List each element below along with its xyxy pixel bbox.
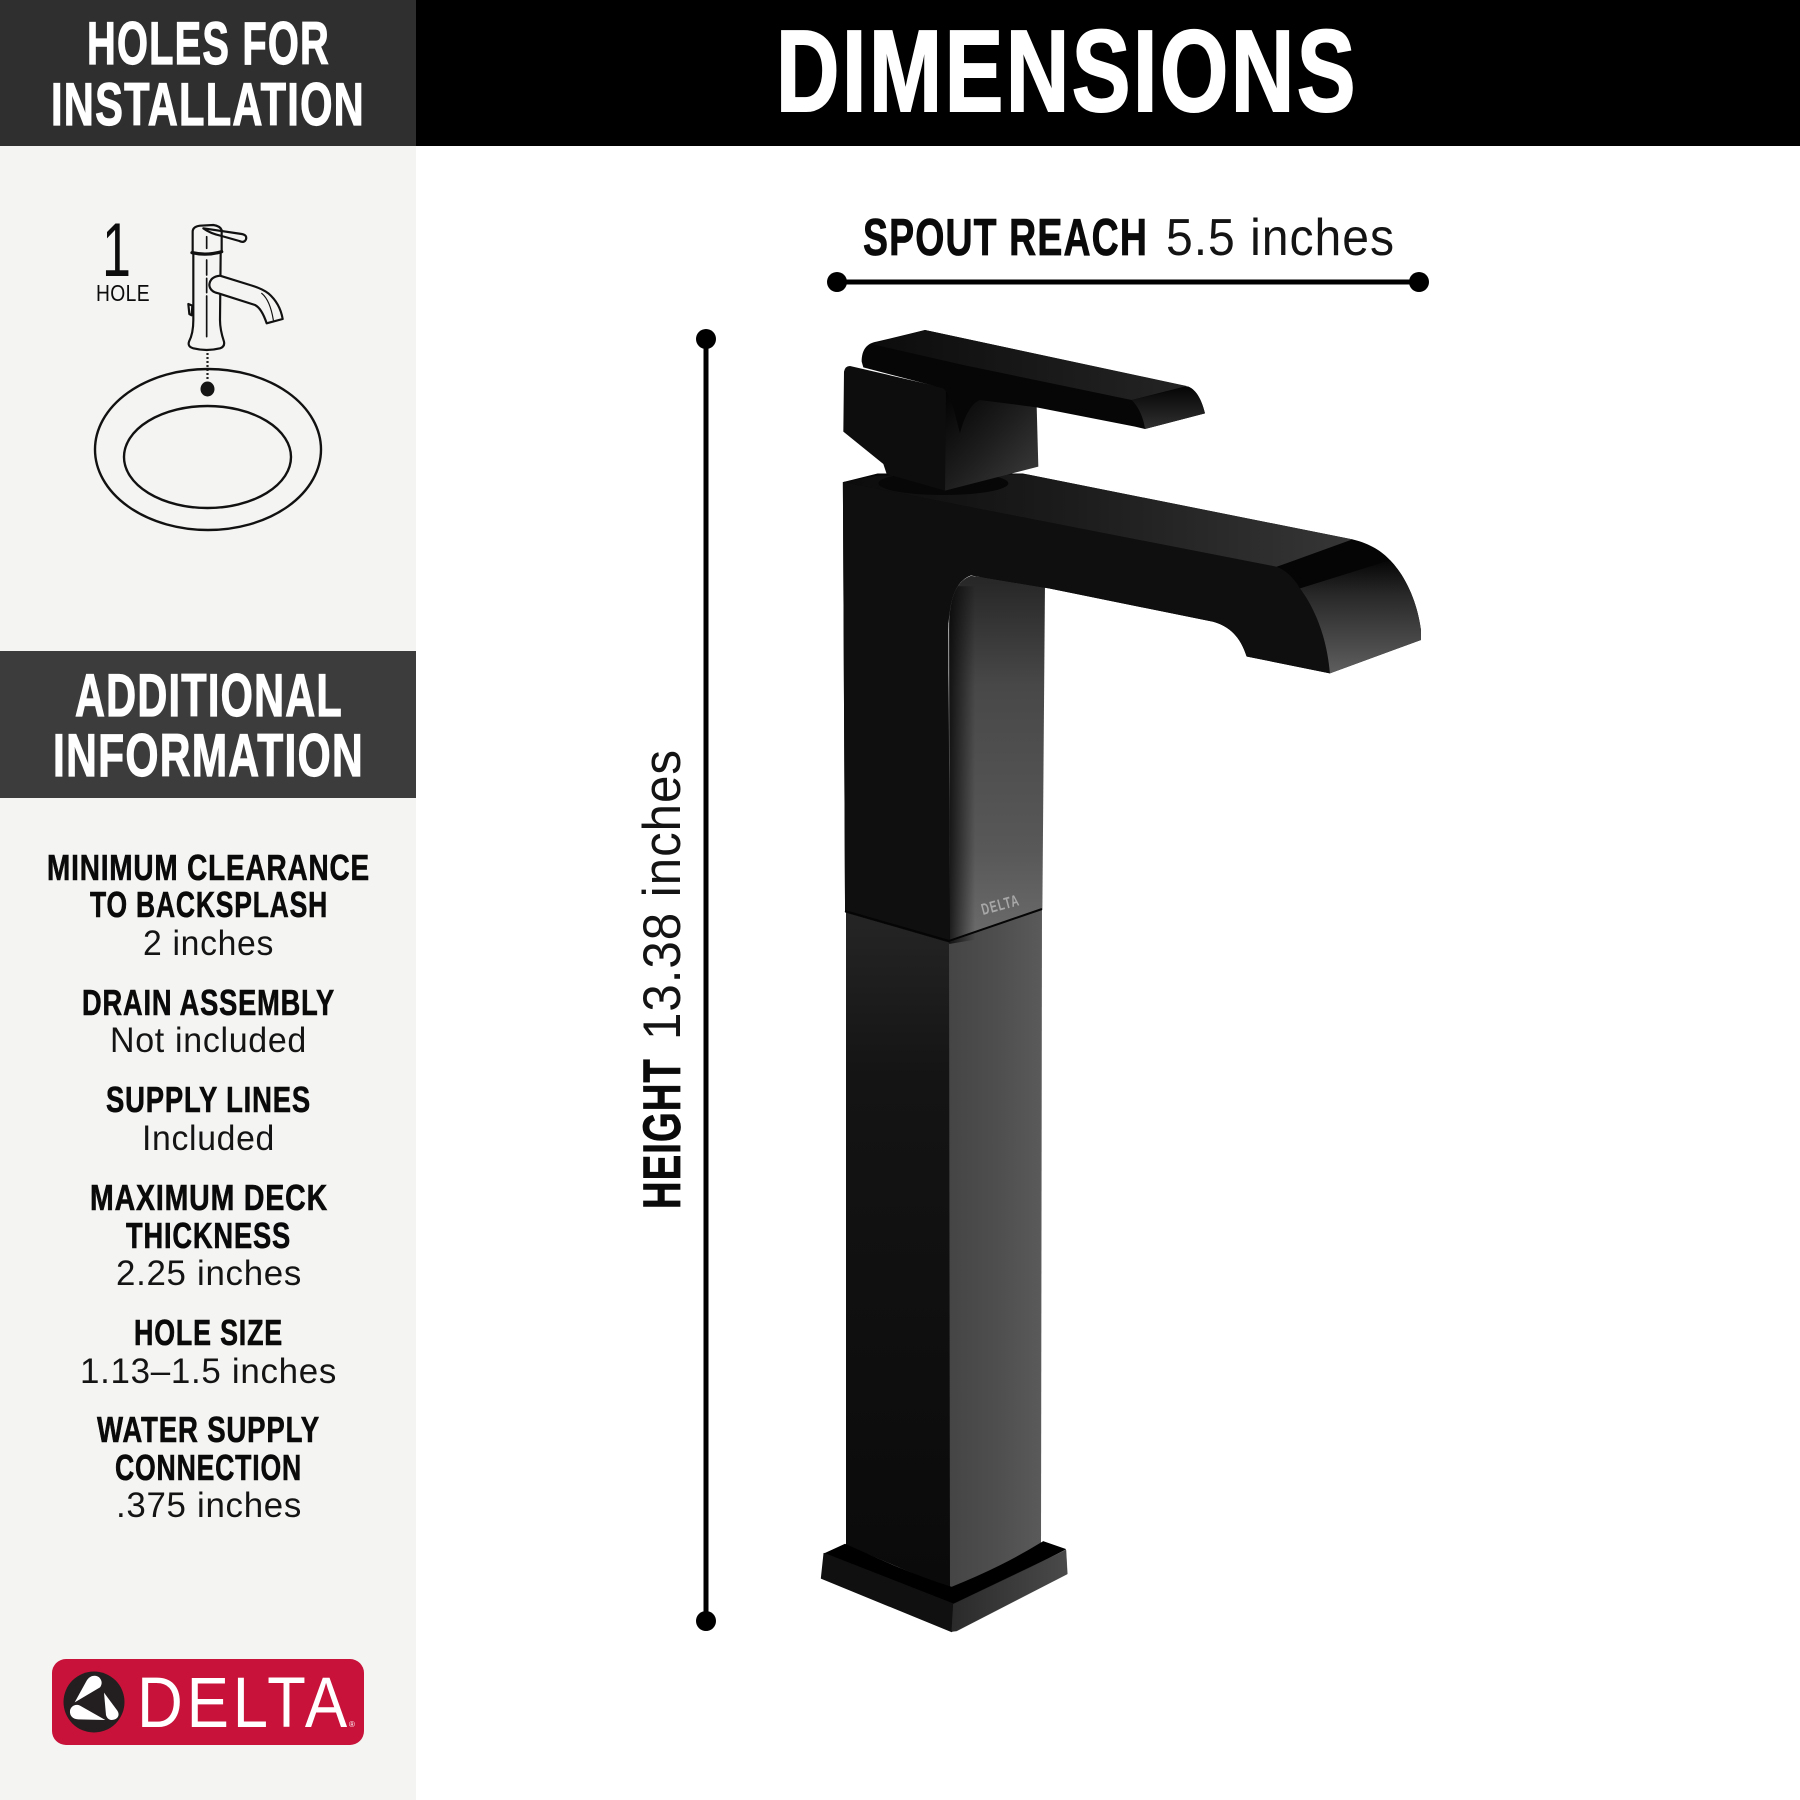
- text block: maximum deck thickness: THICKNESS: [126, 1215, 291, 1256]
- title bar: dimensions: [416, 0, 1800, 146]
- text block: minimum clearance to backsplash: 2 inches: [143, 924, 274, 963]
- text block: water supply connection: [97, 1409, 320, 1525]
- logo: delta: ®: [349, 1720, 355, 1729]
- text block: hole size: [80, 1312, 337, 1391]
- panel: left sidebar: [0, 146, 416, 1800]
- dimension: spout reach label: SPOUT REACH: [863, 209, 1148, 267]
- text block: water supply connection: CONNECTION: [115, 1447, 302, 1488]
- text block: maximum deck thickness: MAXIMUM DECK: [90, 1177, 328, 1218]
- text block: supply lines: [106, 1079, 311, 1158]
- dimension: spout reach label: 5.5 inches: [1166, 209, 1395, 267]
- heading: additional information: [0, 651, 416, 798]
- heading: holes for installation: INSTALLATION: [51, 71, 365, 138]
- text block: supply lines: SUPPLY LINES: [106, 1079, 311, 1120]
- faucet joint seam: [845, 909, 1042, 941]
- faucet lower column: [846, 900, 1042, 1590]
- dimension: height label: 13.38 inches: [633, 749, 692, 1040]
- logo: delta: [52, 1659, 364, 1745]
- faucet illustration: [821, 330, 1421, 1632]
- faucet logo engraving: DELTA: [980, 892, 1022, 919]
- faucet upper body and spout: [843, 473, 1421, 944]
- text block: drain assembly: Not included: [110, 1021, 307, 1060]
- icon: sink with one hole: [95, 353, 321, 530]
- text block: minimum clearance to backsplash: MINIMUM CLEARANCE: [47, 847, 370, 888]
- text block: drain assembly: [82, 982, 335, 1060]
- text block: minimum clearance to backsplash: [47, 847, 370, 963]
- text block: minimum clearance to backsplash: TO BACKSPLASH: [90, 884, 328, 925]
- heading: holes for installation: [0, 0, 416, 146]
- text block: drain assembly: DRAIN ASSEMBLY: [82, 982, 335, 1023]
- faucet base plate: [821, 1542, 1067, 1632]
- heading: additional information: INFORMATION: [53, 722, 364, 789]
- logo: delta: DELTA: [137, 1664, 351, 1743]
- text block: water supply connection: WATER SUPPLY: [97, 1409, 320, 1450]
- heading: additional information: ADDITIONAL: [75, 662, 343, 729]
- icon: one hole count: 1: [102, 208, 132, 293]
- faucet handle lever: [843, 330, 1205, 495]
- title bar: dimensions: DIMENSIONS: [776, 6, 1358, 136]
- icon: one hole count: HOLE: [96, 280, 150, 306]
- text block: water supply connection: .375 inches: [116, 1486, 302, 1525]
- text block: supply lines: Included: [142, 1119, 275, 1158]
- dimension: height label: [633, 749, 692, 1209]
- dimension: height label: HEIGHT: [633, 1058, 692, 1209]
- text block: hole size: 1.13–1.5 inches: [80, 1352, 337, 1391]
- text block: hole size: HOLE SIZE: [134, 1312, 283, 1353]
- text block: maximum deck thickness: 2.25 inches: [116, 1254, 302, 1293]
- arrow: height dimension line: [696, 329, 716, 1631]
- arrow: spout reach dimension line: [827, 272, 1429, 292]
- icon: faucet line drawing: [188, 225, 283, 350]
- text block: maximum deck thickness: [90, 1177, 328, 1293]
- heading: holes for installation: HOLES FOR: [87, 10, 330, 77]
